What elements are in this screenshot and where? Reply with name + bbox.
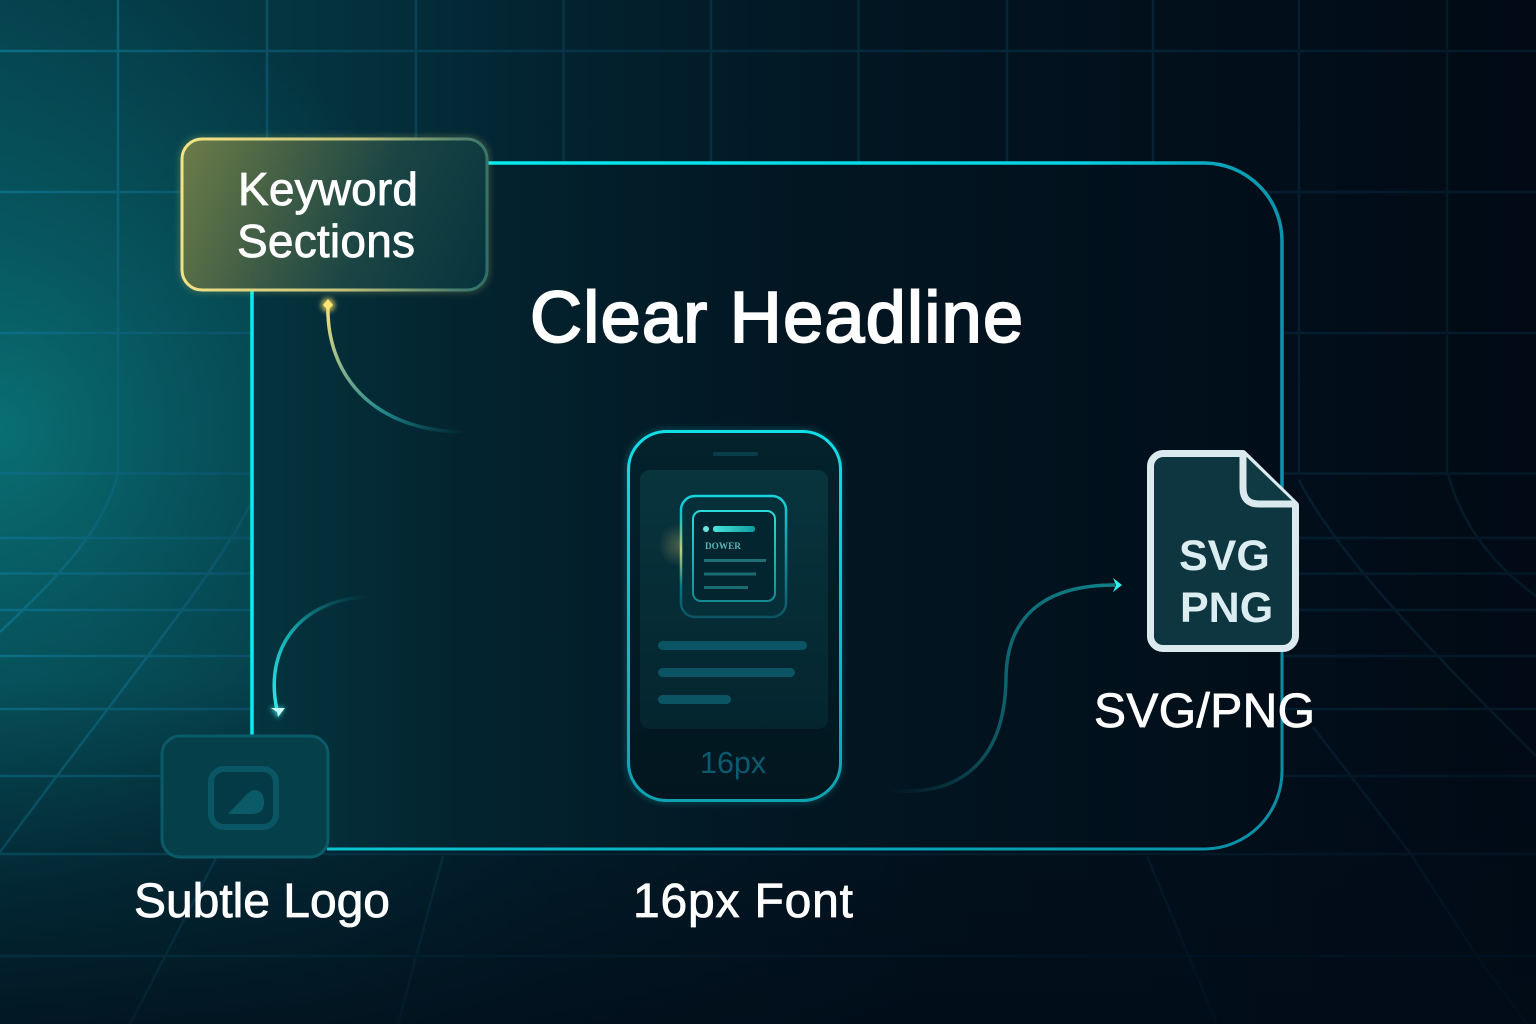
keyword sections box: [181, 138, 488, 291]
keyword sections label: [237, 163, 418, 267]
panel: main rounded frame: [252, 163, 1282, 849]
svg/png label: SVG/PNG: [1094, 685, 1315, 738]
keyword sections label: Keyword: [238, 163, 418, 215]
file type text: SVG: [1179, 532, 1270, 580]
arrow: phone to file: [887, 578, 1122, 791]
icon: logo image: [211, 769, 276, 827]
phone mockup: [628, 431, 840, 801]
arrow: headline to keyword sections: [321, 298, 467, 432]
phone screen: [640, 470, 828, 729]
file fold: [1243, 454, 1296, 504]
arrow: to subtle logo: [270, 597, 370, 719]
keyword sections label: Sections: [237, 215, 415, 267]
screen frame with mini document: DOWER: [705, 541, 742, 551]
icon: svg/png file: [1150, 454, 1296, 649]
subtle logo label: Subtle Logo: [134, 875, 390, 928]
headline: Clear Headline: [530, 278, 1023, 358]
screen frame with mini document: [681, 496, 786, 617]
file type text: PNG: [1180, 584, 1273, 632]
phone speaker: [713, 452, 758, 456]
logo box: [162, 736, 328, 857]
file type text: [1179, 532, 1273, 632]
screen text lines: [658, 641, 807, 704]
16px sample label: 16px: [700, 746, 766, 780]
16px font label: 16px Font: [633, 875, 853, 928]
